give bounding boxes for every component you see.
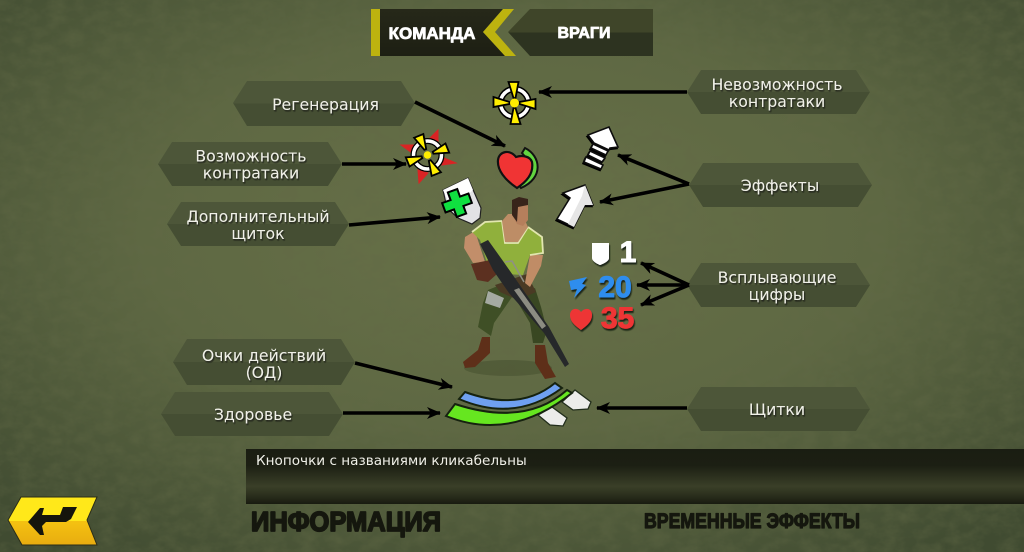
arrow: to number 35 [641,285,689,305]
tab: enemies: ВРАГИ [558,25,610,42]
label: counterattack impossible [687,70,870,114]
heading: information: ИНФОРМАЦИЯ [251,506,441,537]
arrow: to extra shield [349,217,440,225]
label: extra shield: Дополнительный [186,207,330,226]
popup: action points: 20 [598,271,632,304]
label: shields [687,387,870,431]
popup: action points [569,271,632,304]
icon: effect arrow [557,185,593,227]
label: action points [173,339,355,385]
rifle [480,240,569,367]
label: counterattack possible: Возможность [195,146,307,166]
icon: crosshair counter possible [400,128,456,183]
heading: temporary effects: ВРЕМЕННЫЕ ЭФФЕКТЫ [644,510,860,533]
right boot [535,345,556,379]
label: popup numbers [687,263,870,307]
shirt trim [472,221,543,255]
shirt [472,221,543,275]
label: effects [689,163,872,207]
arrow: to health bar [343,411,440,415]
arrow: to shields [597,406,687,410]
label: counterattack possible: контратаки [203,164,299,182]
left boot [463,337,490,368]
arrow: to action bar [355,363,452,387]
magazine pouch [485,291,504,308]
right leg [514,288,547,343]
arrow: to crosshair [539,90,687,94]
rifle frame [505,261,524,282]
bars: shields [538,390,591,426]
label: action points: (ОД) [246,363,282,382]
handguard [514,288,546,329]
glove [471,260,497,282]
label: action points: Очки действий [202,346,326,365]
label: regeneration: Регенерация [272,95,379,114]
label: shields: Щитки [749,400,805,419]
label: counterattack possible [158,142,342,186]
arrow: to red crosshair [342,162,406,166]
label: counterattack impossible: Невозможность [711,75,843,94]
bar: action points [459,383,562,409]
icon: extra shield [439,178,481,224]
right arm [525,255,543,287]
tab: team: КОМАНДА [389,24,475,43]
label: effects: Эффекты [741,176,819,195]
back button [8,497,97,545]
hip strap [495,274,536,300]
label: extra shield: щиток [231,224,285,243]
label: extra shield [167,202,349,246]
left leg [478,283,512,336]
popup: shield count: 1 [620,236,636,269]
popup: health: 35 [601,302,634,335]
hair [512,197,528,222]
head [512,205,528,226]
icon: crosshair counter impossible [494,82,536,124]
label: regeneration [233,81,415,126]
icon: regeneration heart [498,148,538,188]
arrow: to number 1 [641,263,689,285]
arrow: to effect [600,184,689,202]
label: counterattack impossible: контратаки [729,92,825,111]
icon: effect arrow striped [584,127,618,169]
popup: shield count [592,236,636,269]
bar: health [446,390,572,425]
label: health [161,392,343,436]
popup: health [570,302,634,335]
character [463,197,569,379]
arrow: to heart [415,102,505,146]
arrow: to number 20 [637,283,689,287]
label: popup numbers: Всплывающие [718,268,836,287]
tab: team [371,9,516,56]
label: health: Здоровье [214,405,292,424]
tab: enemies [508,9,653,56]
left arm [464,231,485,263]
info box [246,449,1024,504]
arrow: to striped effect [618,155,689,184]
label: popup numbers: цифры [749,285,805,304]
chest [502,214,528,242]
info box: Кнопочки с названиями кликабельны [256,453,527,469]
